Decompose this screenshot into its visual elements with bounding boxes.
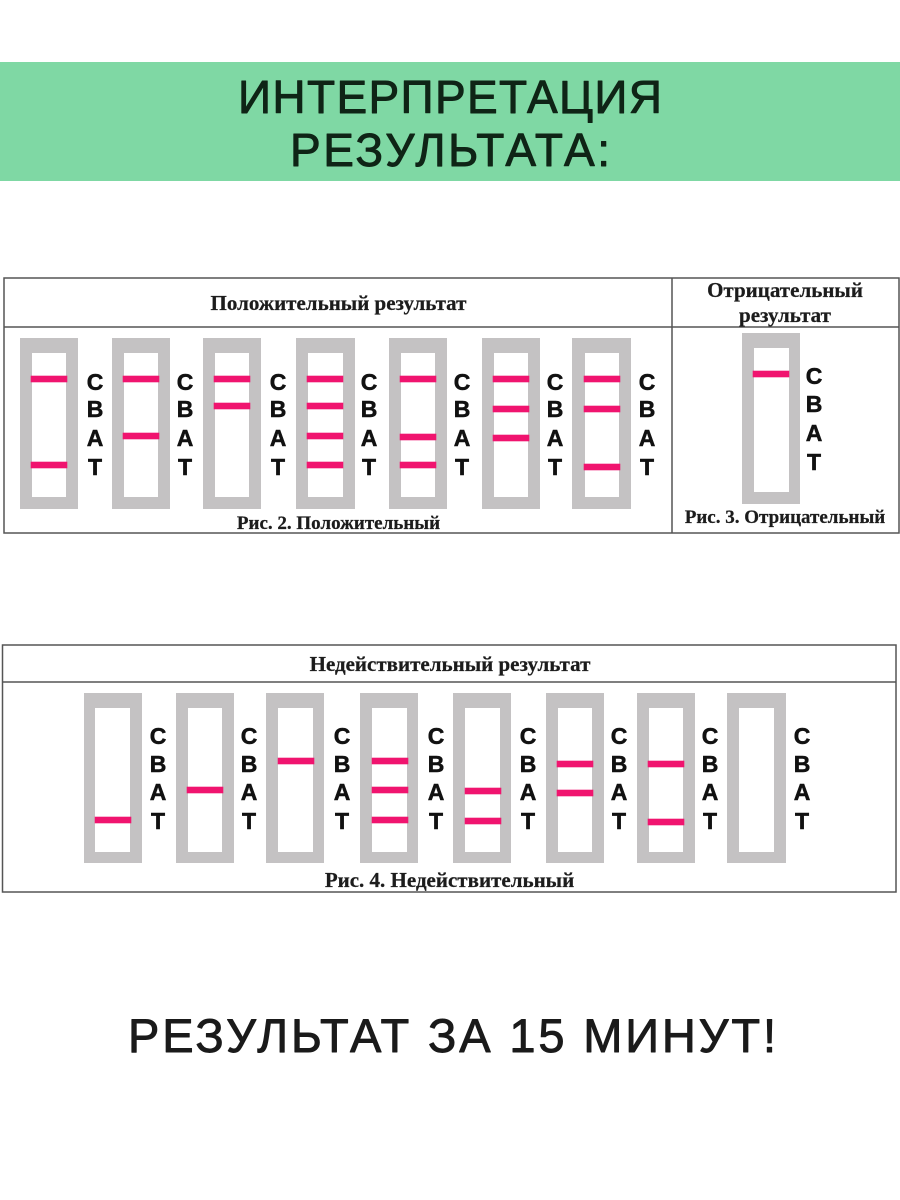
- caption: figure 4: Рис. 4. Недействительный: [325, 868, 574, 892]
- strip: positive 3: T: [271, 454, 285, 480]
- strip: invalid 7: A: [702, 779, 718, 805]
- strip: invalid 1: A: [150, 779, 166, 805]
- strip: invalid 8: B: [794, 751, 810, 777]
- strip: positive 2: [112, 338, 193, 509]
- strip: invalid 3: B: [334, 751, 350, 777]
- heading: negative result: [707, 278, 863, 327]
- strip: invalid 8: T: [795, 808, 809, 834]
- title banner: РЕЗУЛЬТАТА:: [290, 124, 610, 176]
- strip: invalid 1: T: [151, 808, 165, 834]
- strip: invalid 1: C: [150, 723, 166, 749]
- strip: positive 6: C: [547, 369, 563, 395]
- strip: invalid 6: A: [611, 779, 627, 805]
- footer headline: РЕЗУЛЬТАТ ЗА 15 МИНУТ!: [128, 1009, 776, 1062]
- heading: negative result: результат: [739, 303, 832, 327]
- strip: positive 3: [203, 338, 286, 509]
- strip: negative: C: [806, 363, 822, 389]
- strip: positive 2: B: [177, 396, 193, 422]
- strip: positive 1: B: [87, 396, 103, 422]
- strip: positive 6: A: [547, 425, 563, 451]
- caption: figure 2: Рис. 2. Положительный: [237, 513, 440, 534]
- strip: positive 4: C: [361, 369, 377, 395]
- title banner: [0, 62, 900, 181]
- strip: positive 5: B: [454, 396, 470, 422]
- strip: invalid 8: [727, 693, 810, 863]
- strip: positive 7: [572, 338, 655, 509]
- heading: invalid result: Недействительный результат: [310, 652, 591, 676]
- strip: positive 2: A: [177, 425, 193, 451]
- heading: negative result: Отрицательный: [707, 278, 863, 302]
- strip: positive 1: [20, 338, 103, 509]
- strip: invalid 1: B: [150, 751, 166, 777]
- strip: invalid 5: B: [520, 751, 536, 777]
- strip: positive 4: A: [361, 425, 377, 451]
- strip: invalid 7: C: [702, 723, 718, 749]
- strip: invalid 8: C: [794, 723, 810, 749]
- strip: invalid 6: B: [611, 751, 627, 777]
- strip: invalid 3: C: [334, 723, 350, 749]
- strip: positive 6: B: [547, 396, 563, 422]
- strip: positive 6: T: [548, 454, 562, 480]
- strip: invalid 7: T: [703, 808, 717, 834]
- strip: positive 2: C: [177, 369, 193, 395]
- strip: positive 5: [389, 338, 470, 509]
- strip: positive 2: T: [178, 454, 192, 480]
- strip: negative: [742, 333, 822, 504]
- strip: positive 4: T: [362, 454, 376, 480]
- strip: positive 7: T: [640, 454, 654, 480]
- caption: figure 3: Рис. 3. Отрицательный: [685, 507, 885, 528]
- strip: invalid 7: [637, 693, 718, 863]
- strip: invalid 4: A: [428, 779, 444, 805]
- strip: positive 5: T: [455, 454, 469, 480]
- strip: invalid 5: A: [520, 779, 536, 805]
- strip: invalid 5: T: [521, 808, 535, 834]
- strip: invalid 4: C: [428, 723, 444, 749]
- strip: positive 6: [482, 338, 563, 509]
- strip: positive 7: A: [639, 425, 655, 451]
- strip: invalid 7: B: [702, 751, 718, 777]
- strip: invalid 6: T: [612, 808, 626, 834]
- strip: positive 7: C: [639, 369, 655, 395]
- strip: negative: T: [807, 449, 821, 475]
- strip: positive 3: C: [270, 369, 286, 395]
- strip: invalid 1: [84, 693, 166, 863]
- strip: invalid 3: T: [335, 808, 349, 834]
- strip: invalid 8: A: [794, 779, 810, 805]
- table: positive and negative results: [4, 278, 899, 534]
- strip: invalid 3: [266, 693, 350, 863]
- strip: invalid 2: B: [241, 751, 257, 777]
- strip: invalid 3: A: [334, 779, 350, 805]
- strip: invalid 4: T: [429, 808, 443, 834]
- strip: positive 7: B: [639, 396, 655, 422]
- strip: positive 1: C: [87, 369, 103, 395]
- table: invalid results: [2, 645, 896, 892]
- strip: positive 4: B: [361, 396, 377, 422]
- strip: invalid 2: T: [242, 808, 256, 834]
- strip: invalid 5: C: [520, 723, 536, 749]
- strip: positive 3: B: [270, 396, 286, 422]
- strip: negative: B: [806, 391, 822, 417]
- strip: invalid 6: C: [611, 723, 627, 749]
- heading: positive result: Положительный результат: [211, 291, 467, 315]
- strip: positive 5: C: [454, 369, 470, 395]
- strip: invalid 6: [546, 693, 627, 863]
- strip: negative: A: [806, 420, 822, 446]
- strip: invalid 2: [176, 693, 257, 863]
- strip: positive 1: T: [88, 454, 102, 480]
- strip: invalid 4: B: [428, 751, 444, 777]
- strip: invalid 2: C: [241, 723, 257, 749]
- strip: invalid 4: [360, 693, 444, 863]
- strip: positive 4: [296, 338, 377, 509]
- strip: positive 3: A: [270, 425, 286, 451]
- title banner: ИНТЕРПРЕТАЦИЯ: [238, 71, 662, 123]
- strip: invalid 2: A: [241, 779, 257, 805]
- strip: positive 1: A: [87, 425, 103, 451]
- strip: positive 5: A: [454, 425, 470, 451]
- strip: invalid 5: [453, 693, 536, 863]
